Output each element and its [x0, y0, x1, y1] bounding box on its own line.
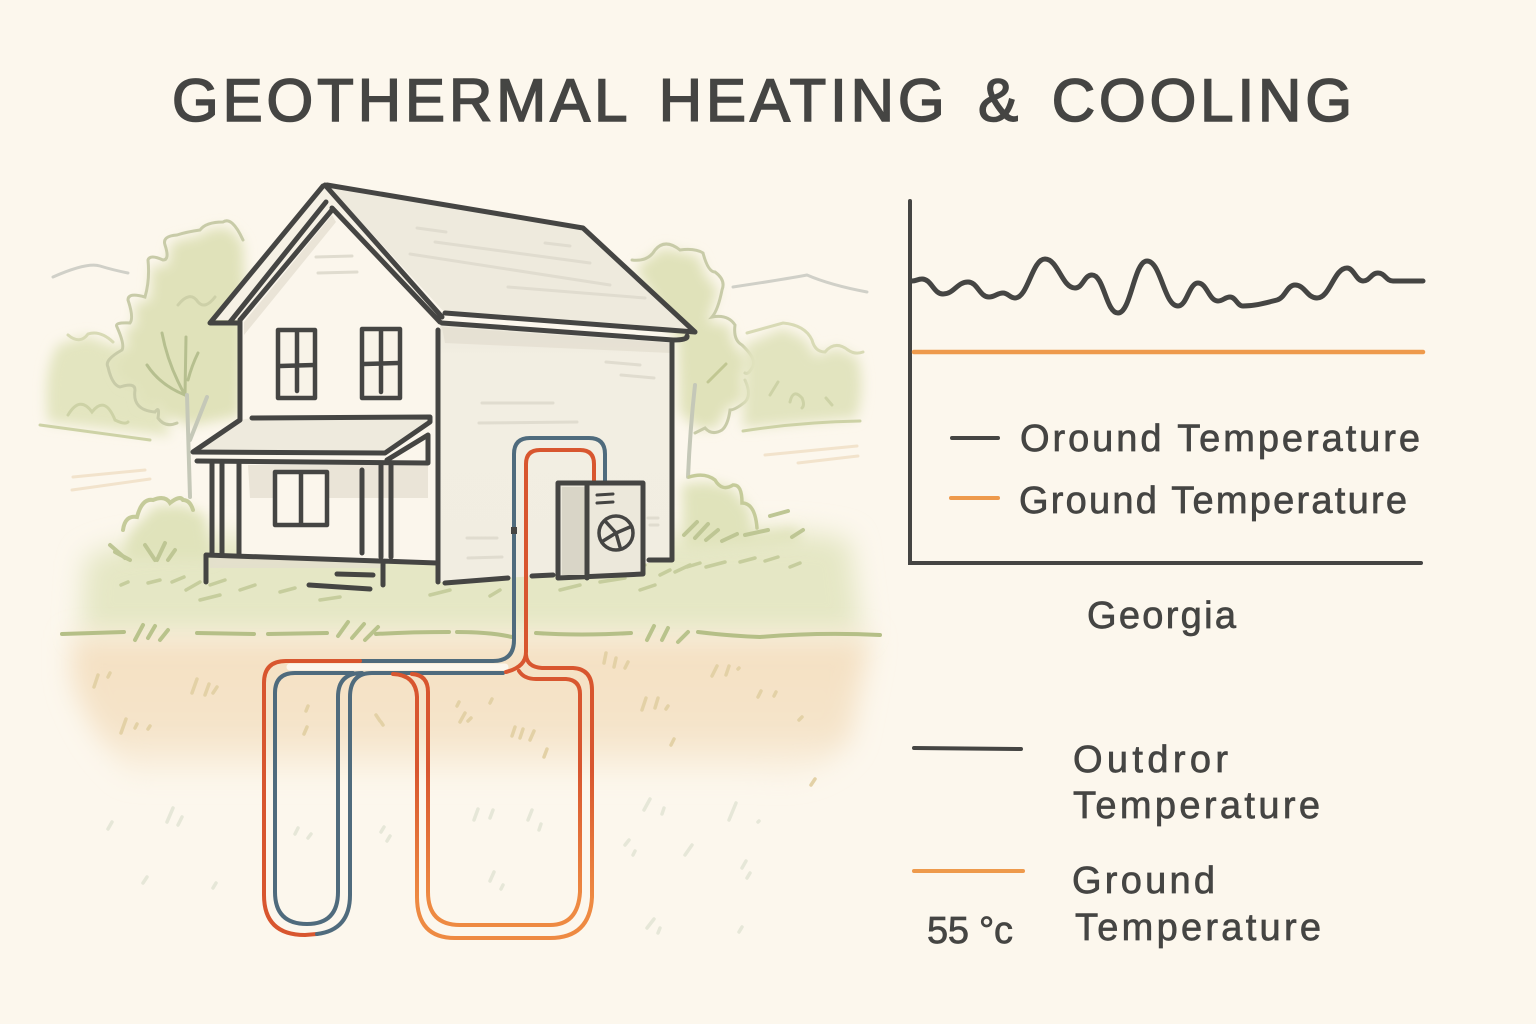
left back bush — [40, 333, 170, 440]
temperature value: 55 °c — [927, 910, 1013, 952]
legend key orange — [951, 496, 998, 500]
soil marks — [94, 653, 815, 785]
ground label: Ground — [1072, 860, 1215, 902]
chart location label: Georgia — [1087, 595, 1237, 637]
ground temperature line — [914, 350, 1423, 354]
right loop inner — [412, 671, 580, 925]
lower legend — [914, 739, 1321, 952]
pipe section, outer blue loop — [317, 673, 503, 934]
pipe section, red top-left — [264, 661, 360, 935]
pipe section, inner blue loop — [275, 673, 362, 924]
right shrub — [682, 475, 803, 550]
wall outlines — [240, 320, 672, 583]
porch columns — [212, 462, 391, 557]
return pipe from unit, blue — [360, 438, 605, 661]
supply pipe from unit, red — [506, 450, 594, 672]
pale gap between pipes — [290, 664, 505, 670]
distant hill right — [733, 275, 867, 292]
porch roof — [193, 417, 430, 453]
house — [193, 185, 695, 589]
geothermal loop pipes — [264, 438, 605, 938]
landscape background — [40, 221, 880, 933]
ground key line — [914, 869, 1023, 873]
porch beam — [197, 435, 428, 463]
title: GEOTHERMAL HEATING & COOLING — [172, 67, 1352, 134]
legend label one: Oround Temperature — [1020, 418, 1420, 460]
distant hill left — [53, 265, 128, 277]
ground line — [62, 632, 880, 637]
right back bush — [743, 323, 863, 431]
porch floor and steps — [206, 555, 437, 589]
siding sketch marks — [316, 228, 658, 558]
ground line grass ticks — [135, 622, 688, 642]
right loop outer — [393, 655, 592, 938]
roof lines — [210, 185, 695, 340]
porch window — [275, 472, 327, 525]
meadow wash — [80, 531, 862, 634]
front wall — [240, 210, 438, 563]
deep ground marks — [108, 799, 759, 933]
ground label second line: Temperature — [1075, 907, 1321, 949]
pipe clamp — [511, 527, 517, 534]
outdoor key line — [914, 748, 1021, 749]
legend key dark — [952, 436, 998, 440]
temperature line chart — [910, 201, 1423, 563]
chart axes — [910, 201, 1421, 563]
upper windows — [278, 329, 400, 398]
right wall — [440, 325, 673, 582]
field sketch lines — [72, 446, 858, 490]
left shrub — [110, 498, 212, 560]
left tree — [107, 221, 245, 497]
roof surface — [327, 185, 695, 332]
vent marks — [597, 494, 613, 503]
outdoor label second line: Temperature — [1073, 785, 1320, 827]
soil wash — [72, 638, 870, 777]
gable trim — [210, 185, 442, 325]
legend label two: Ground Temperature — [1019, 480, 1407, 522]
right tree — [632, 244, 754, 477]
chart legend — [951, 418, 1420, 522]
grass strokes — [121, 550, 800, 600]
soft wall shadows — [210, 215, 672, 576]
outdoor temperature wave — [912, 259, 1423, 313]
fan icon — [599, 516, 633, 550]
outdoor label: Outdror — [1073, 739, 1228, 781]
heat pump unit — [558, 483, 643, 578]
